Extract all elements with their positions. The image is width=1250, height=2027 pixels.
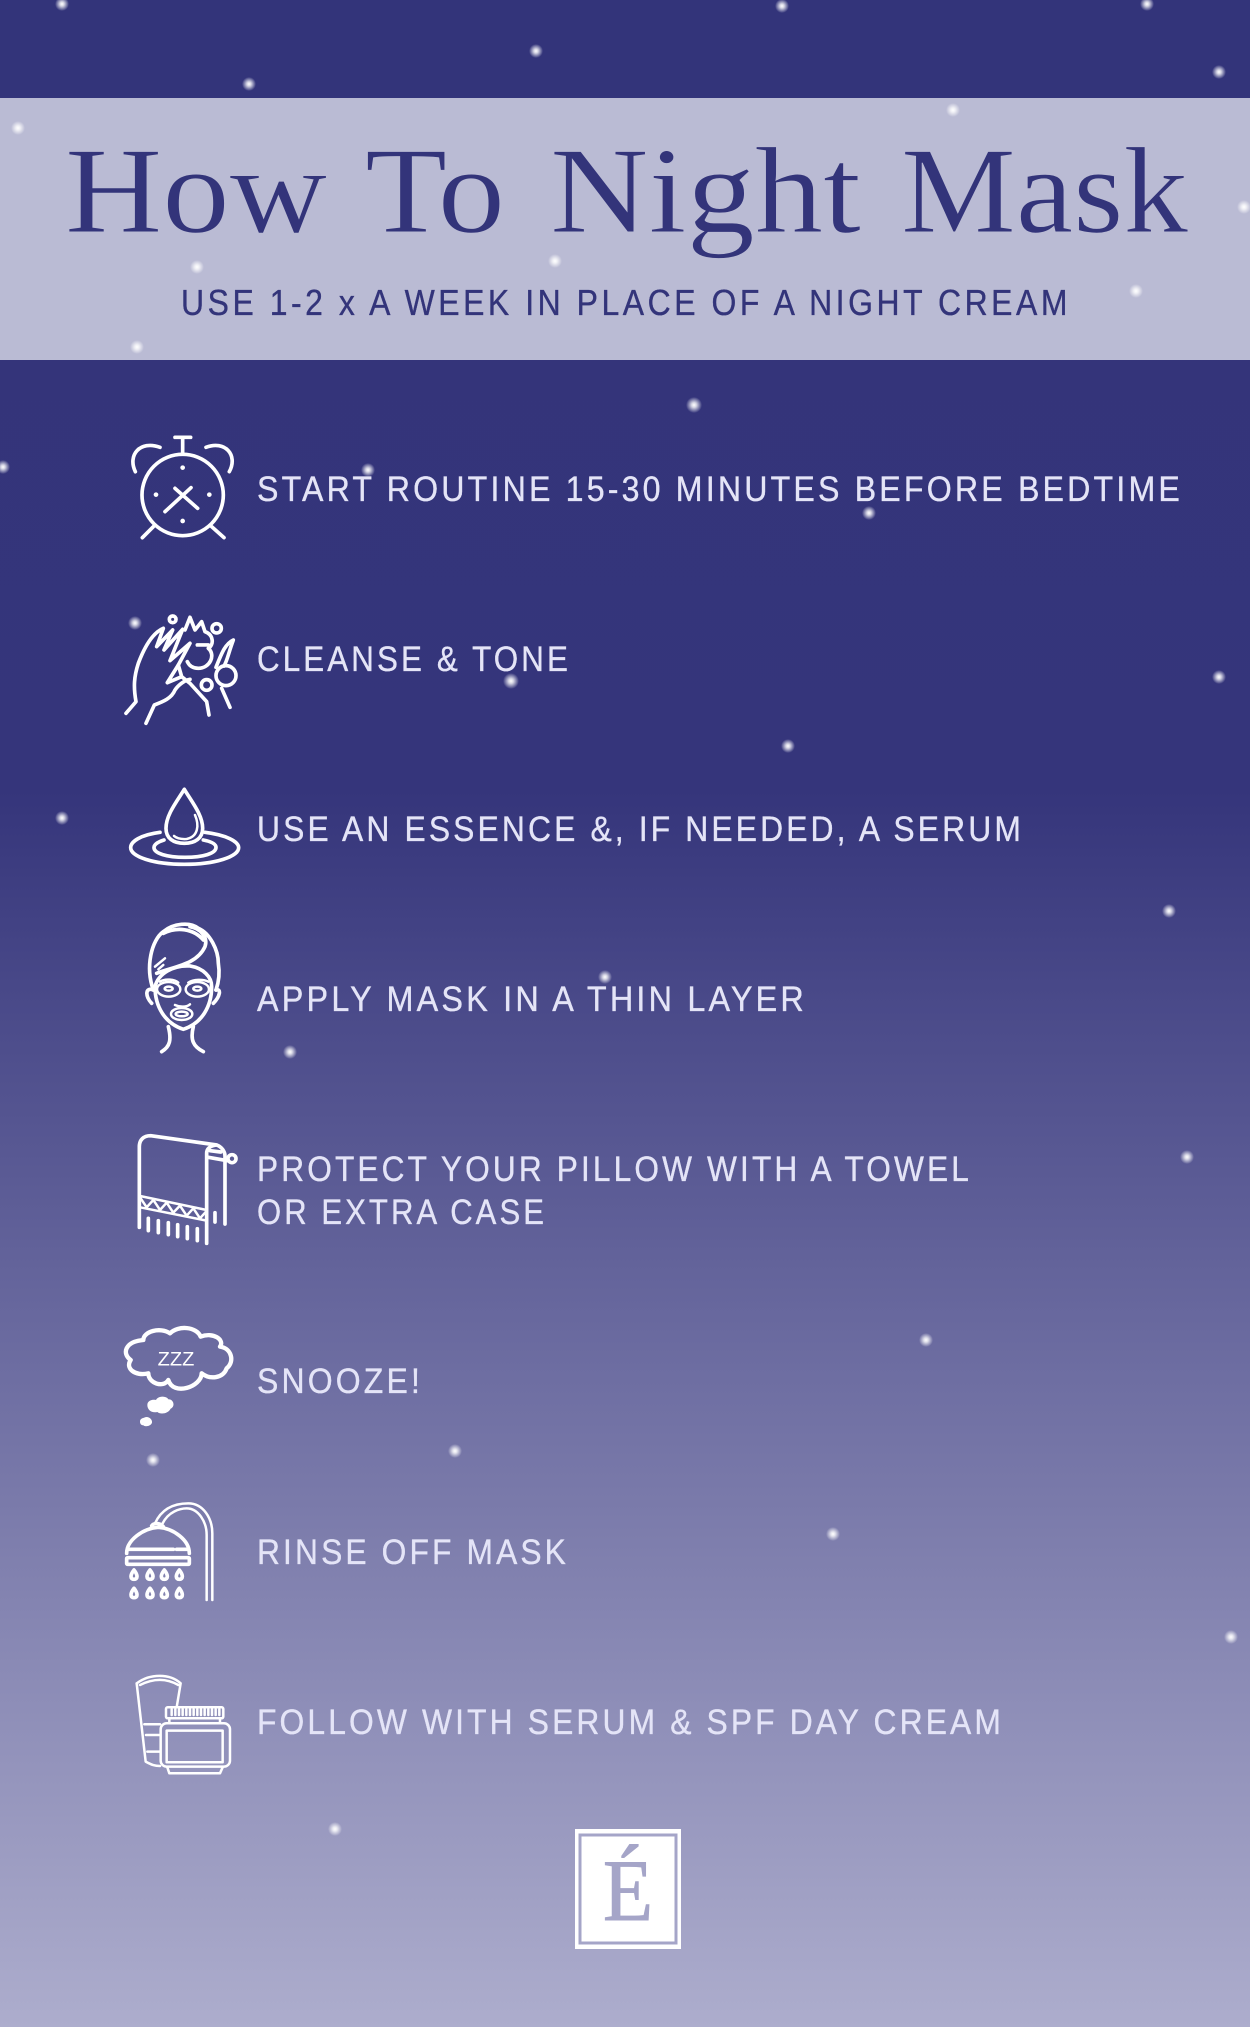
- logo: É monogram: É: [603, 1843, 653, 1940]
- header band: [0, 98, 1250, 360]
- icon: thought cloud with zzz: ZZZ: [158, 1349, 195, 1370]
- title: Night: [550, 122, 861, 259]
- step text: OR EXTRA CASE: [257, 1192, 547, 1232]
- step 7: rinse: [127, 1503, 569, 1600]
- step text: SNOOZE!: [257, 1361, 423, 1401]
- icon: droplet with ripples: [131, 789, 239, 864]
- title: Mask: [901, 122, 1189, 259]
- icon: towel on rail: [139, 1136, 236, 1243]
- icon: shower head: [127, 1503, 212, 1600]
- icon: tube and jar: [137, 1676, 230, 1773]
- step text: [257, 1149, 972, 1232]
- title: [65, 122, 1189, 259]
- step 1: start routine: [133, 437, 1183, 538]
- icon: washing hands: [126, 616, 236, 723]
- step text: RINSE OFF MASK: [257, 1532, 569, 1572]
- icon: alarm clock: [133, 437, 232, 538]
- step 8: follow with serum and SPF: [137, 1676, 1004, 1773]
- step text: CLEANSE & TONE: [257, 639, 571, 679]
- step text: USE AN ESSENCE &, IF NEEDED, A SERUM: [257, 809, 1024, 849]
- icon: face with towel turban and mask: [147, 924, 219, 1052]
- step 5: protect pillow: [139, 1136, 972, 1243]
- logo: É monogram: [575, 1829, 681, 1949]
- step text: START ROUTINE 15-30 MINUTES BEFORE BEDTIME: [257, 469, 1183, 509]
- step 2: cleanse and tone: [126, 616, 571, 723]
- subtitle: USE 1-2 x A WEEK IN PLACE OF A NIGHT CREAM: [181, 282, 1071, 323]
- step text: FOLLOW WITH SERUM & SPF DAY CREAM: [257, 1702, 1004, 1742]
- step text: APPLY MASK IN A THIN LAYER: [257, 979, 807, 1019]
- title: To: [365, 122, 505, 259]
- step 3: essence and serum: [131, 789, 1024, 864]
- step text: PROTECT YOUR PILLOW WITH A TOWEL: [257, 1149, 972, 1189]
- step 6: snooze: [126, 1328, 423, 1426]
- step 4: apply mask: [147, 924, 807, 1052]
- title: How: [65, 122, 327, 259]
- icon: thought cloud with zzz: [126, 1328, 231, 1426]
